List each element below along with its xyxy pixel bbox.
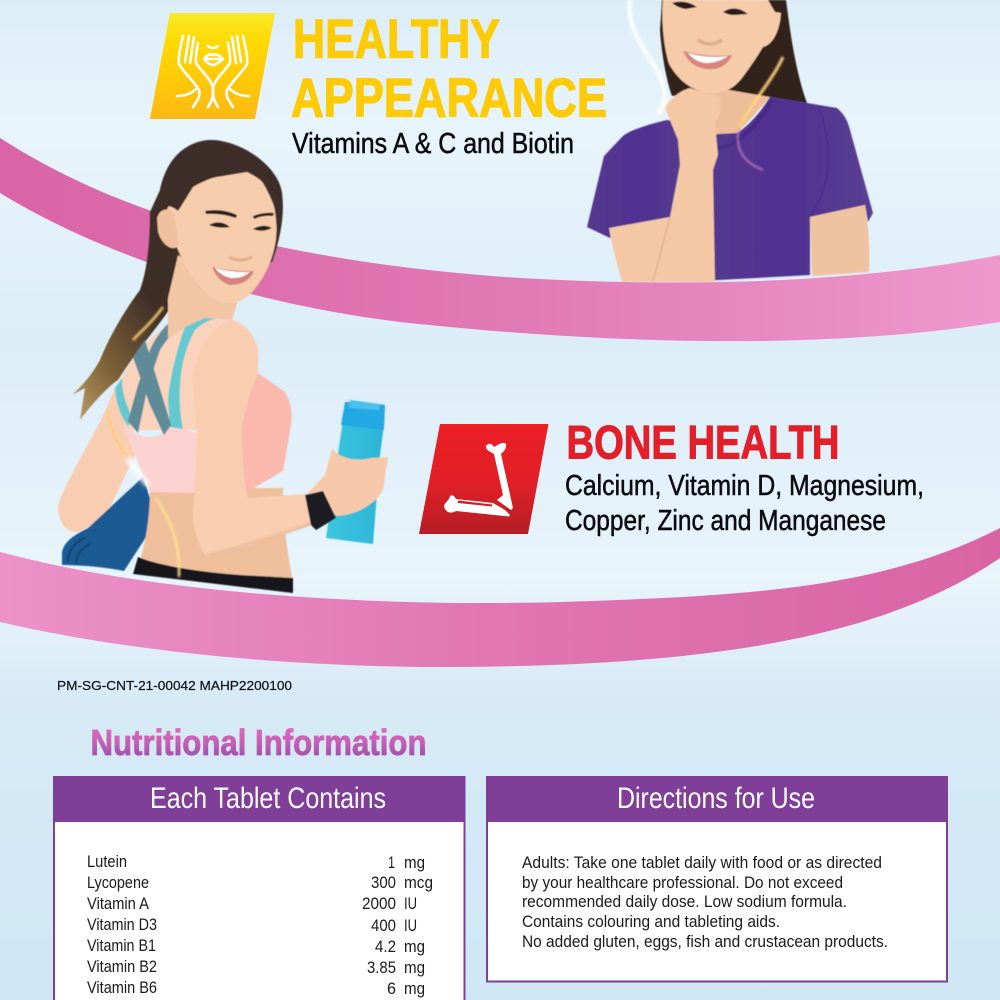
hair top	[157, 140, 282, 260]
ear	[157, 210, 179, 248]
panel title: Each Tablet Contains	[150, 782, 386, 815]
grey crossed strap	[128, 312, 207, 435]
directions text: recommended daily dose. Low sodium formula.	[522, 892, 847, 911]
directions text: Adults: Take one tablet daily with food or as directed	[522, 853, 882, 872]
heading: healthy appearance: HEALTHY	[293, 8, 500, 70]
nose	[229, 257, 252, 260]
wrist watch	[305, 491, 336, 530]
nutrient names: Lycopene	[87, 873, 149, 892]
rear arm	[58, 385, 135, 532]
subheading: minerals	[565, 470, 924, 537]
nutrient units: mg	[404, 958, 425, 977]
panel header	[486, 776, 948, 822]
nutrient names	[87, 852, 157, 997]
heading: healthy appearance	[291, 8, 607, 128]
directions text: No added gluten, eggs, fish and crustacean products.	[522, 932, 888, 951]
sports bra front	[235, 373, 292, 493]
nutrient amounts: 4.2	[375, 937, 396, 956]
pink ribbon: upper	[0, 138, 1000, 341]
nutrient units: mcg	[404, 873, 433, 892]
photo: woman with water bottle and yoga mat	[58, 140, 388, 593]
yoga mat	[62, 477, 157, 571]
heading: bone health: BONE HEALTH	[566, 416, 840, 468]
pink ribbon: lower	[0, 528, 1000, 667]
nutrient names: Lutein	[87, 852, 127, 871]
glowing streak on purple t-shirt	[738, 57, 783, 170]
nutrient units: mg	[404, 979, 425, 998]
hair back	[72, 140, 283, 420]
nutrient units: mg	[404, 937, 425, 956]
nutrient names: Vitamin A	[87, 894, 150, 913]
product code: PM-SG-CNT-21-00042 MAHP2200100	[57, 679, 292, 693]
shorts	[133, 557, 293, 593]
nutrient amounts: 400	[371, 916, 396, 935]
icon: yellow parallelogram with hands	[150, 13, 275, 119]
nutrient amounts	[362, 853, 396, 998]
teal strap	[115, 318, 220, 429]
subheading: minerals: Copper, Zinc and Manganese	[565, 505, 886, 537]
nutrient units: mg	[404, 853, 425, 872]
nutrient amounts: 2000	[362, 894, 396, 913]
water bottle	[326, 402, 385, 544]
hand on bottle	[305, 449, 388, 516]
glowing streak on back	[107, 307, 179, 577]
nutrient names: Vitamin B1	[87, 936, 156, 955]
front arm	[193, 320, 337, 557]
heading: nutritional information: Nutritional Information	[90, 722, 426, 763]
photo: woman in purple t-shirt	[587, 0, 873, 282]
neck	[168, 255, 238, 340]
lower torso	[136, 488, 293, 582]
directions text: by your healthcare professional. Do not exceed	[522, 873, 843, 892]
subheading: vitamins: Vitamins A & C and Biotin	[292, 128, 574, 160]
nutrient amounts: 3.85	[367, 958, 396, 977]
nutrient amounts: 6	[387, 979, 396, 998]
directions text	[522, 853, 888, 951]
icon: arm bones	[444, 443, 513, 516]
eyes and brows	[205, 210, 274, 231]
smile	[212, 267, 254, 285]
panel title: Directions for Use	[617, 782, 815, 815]
nutrient units: IU	[404, 916, 417, 935]
icon: red parallelogram with arm bones	[419, 424, 548, 534]
panel header	[53, 776, 465, 822]
decorative white swoosh	[629, 0, 665, 114]
nutrient amounts: 1	[388, 853, 395, 872]
face	[166, 171, 277, 303]
directions text: Contains colouring and tableting aids.	[522, 912, 780, 931]
panel: directions for use	[486, 776, 948, 982]
heading: healthy appearance: APPEARANCE	[291, 66, 607, 128]
nutrient names: Vitamin B6	[87, 978, 157, 997]
subheading: minerals: Calcium, Vitamin D, Magnesium,	[565, 470, 924, 502]
panel: each tablet contains	[53, 776, 465, 1000]
nutrient units	[404, 853, 433, 998]
arm shadow	[207, 522, 316, 555]
nutrient amounts: 300	[371, 873, 396, 892]
nutrient names: Vitamin B2	[87, 957, 157, 976]
upper back	[118, 318, 258, 430]
nutrient units: IU	[404, 894, 417, 913]
sports bra back	[123, 425, 200, 493]
icon: hands and lips	[177, 36, 249, 107]
nutrient names: Vitamin D3	[87, 915, 157, 934]
